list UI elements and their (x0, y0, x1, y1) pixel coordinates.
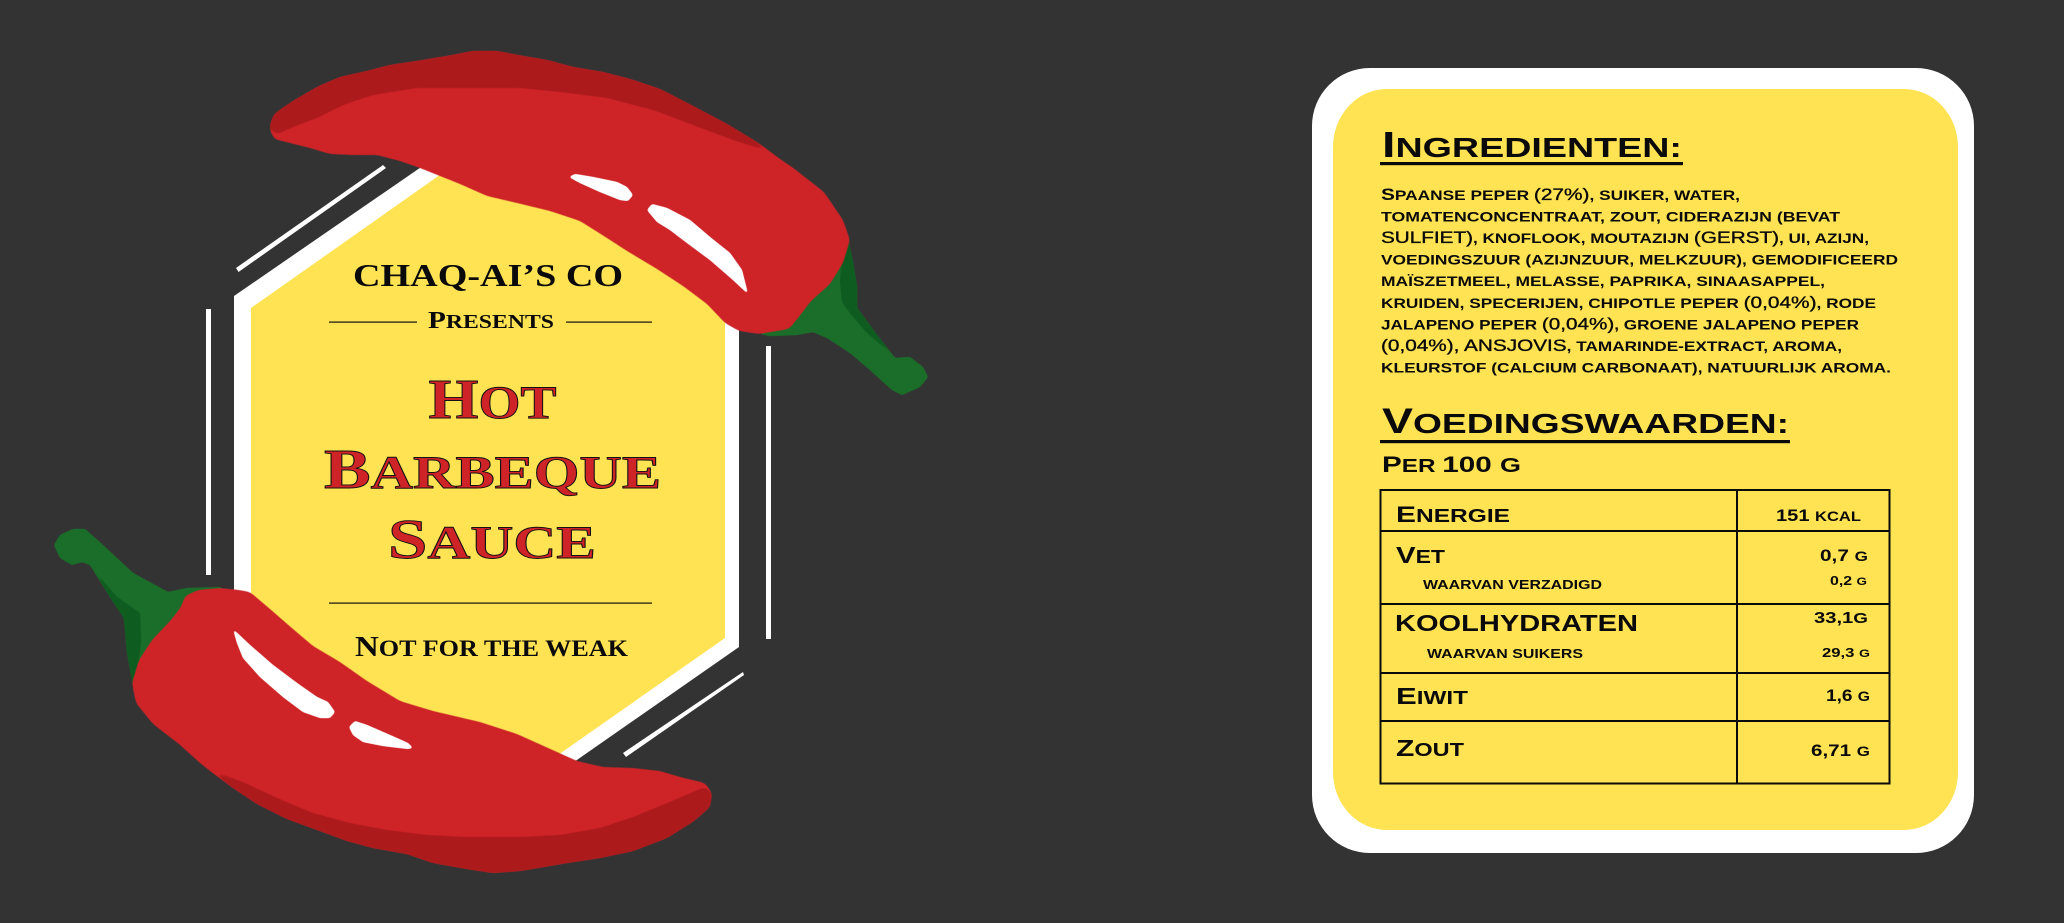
row: vet: 0,2 G (1830, 573, 1867, 588)
table grid (1380, 490, 1890, 784)
divider rule (329, 602, 652, 604)
heading: nutrition values: V OEDINGSWAARDEN: (1382, 402, 1789, 441)
product title: BARBEQUE (324, 439, 661, 501)
ingredients list: SULFIET) , KNOFLOOK, MOUTAZIJN (GERST) , UI, AZIJN, (1381, 229, 1869, 247)
icon: bottom chili pepper (54, 529, 712, 873)
panel: ingredients and nutrition card (1312, 68, 1974, 853)
product title (324, 369, 661, 571)
row: koolhydraten (1395, 610, 1870, 661)
per 100 g subheading: P ER 100 G (1382, 452, 1521, 477)
row: koolhydraten: 29,3 G (1822, 645, 1870, 660)
row: energie: E NERGIE (1396, 502, 1510, 527)
ingredients list: SPAANSE PEPER (27%) , SUIKER, WATER, (1381, 186, 1740, 204)
ingredients list: (0,04%), ANSJOVIS , TAMARINDE-EXTRACT, AROMA, (1381, 337, 1842, 355)
ingredients list: TOMATENCONCENTRAAT, ZOUT, CIDERAZIJN (BEVAT (1381, 210, 1841, 224)
row: vet: 0,7 G (1820, 546, 1868, 565)
row: energie (1396, 502, 1862, 527)
ingredients list: VOEDINGSZUUR (AZIJNZUUR, MELKZUUR), GEMODIFICEERD (1381, 252, 1898, 268)
row: zout: 6,71 G (1811, 741, 1870, 760)
row: zout: ZOUT (1396, 735, 1464, 761)
ingredients list: KRUIDEN, SPECERIJEN, CHIPOTLE PEPER (0,04%) , RODE (1381, 294, 1876, 312)
row: vet (1396, 542, 1868, 592)
ingredients list: JALAPENO PEPER (0,04%) , GROENE JALAPENO PEPER (1381, 316, 1859, 334)
row: vet: WAARVAN VERZADIGD (1423, 577, 1602, 592)
nutrition table (1380, 490, 1890, 784)
row: energie: 151 KCAL (1776, 506, 1862, 525)
tagline: NOT FOR THE WEAK (355, 631, 628, 663)
product title: SAUCE (388, 509, 596, 571)
row: zout (1396, 735, 1870, 761)
ingredients list: KLEURSTOF (CALCIUM CARBONAAT), NATUURLIJK AROMA. (1381, 360, 1891, 376)
product title: HOT (428, 369, 556, 431)
heading: ingredients: INGREDIENTEN: (1382, 124, 1682, 165)
ingredients list: MAÏSZETMEEL, MELASSE, PAPRIKA, SINAASAPPEL, (1381, 274, 1825, 289)
row: koolhydraten: 33,1 G (1814, 610, 1868, 627)
brand name: CHAQ-AI’S CO (353, 257, 623, 293)
decorative white frame lines (206, 165, 771, 757)
ingredients list (1381, 186, 1898, 376)
presents line: PRESENTS (428, 308, 554, 334)
icon: top chili pepper (270, 51, 928, 395)
row: koolhydraten: KOOLHYDRATEN (1395, 610, 1638, 636)
row: koolhydraten: WAARVAN SUIKERS (1427, 646, 1583, 661)
row: eiwit: E IWIT (1396, 683, 1468, 709)
row: vet: VET (1396, 542, 1445, 568)
row: eiwit: 1,6 G (1826, 686, 1870, 705)
row: eiwit (1396, 683, 1870, 709)
panel: hexagon label (234, 122, 739, 823)
